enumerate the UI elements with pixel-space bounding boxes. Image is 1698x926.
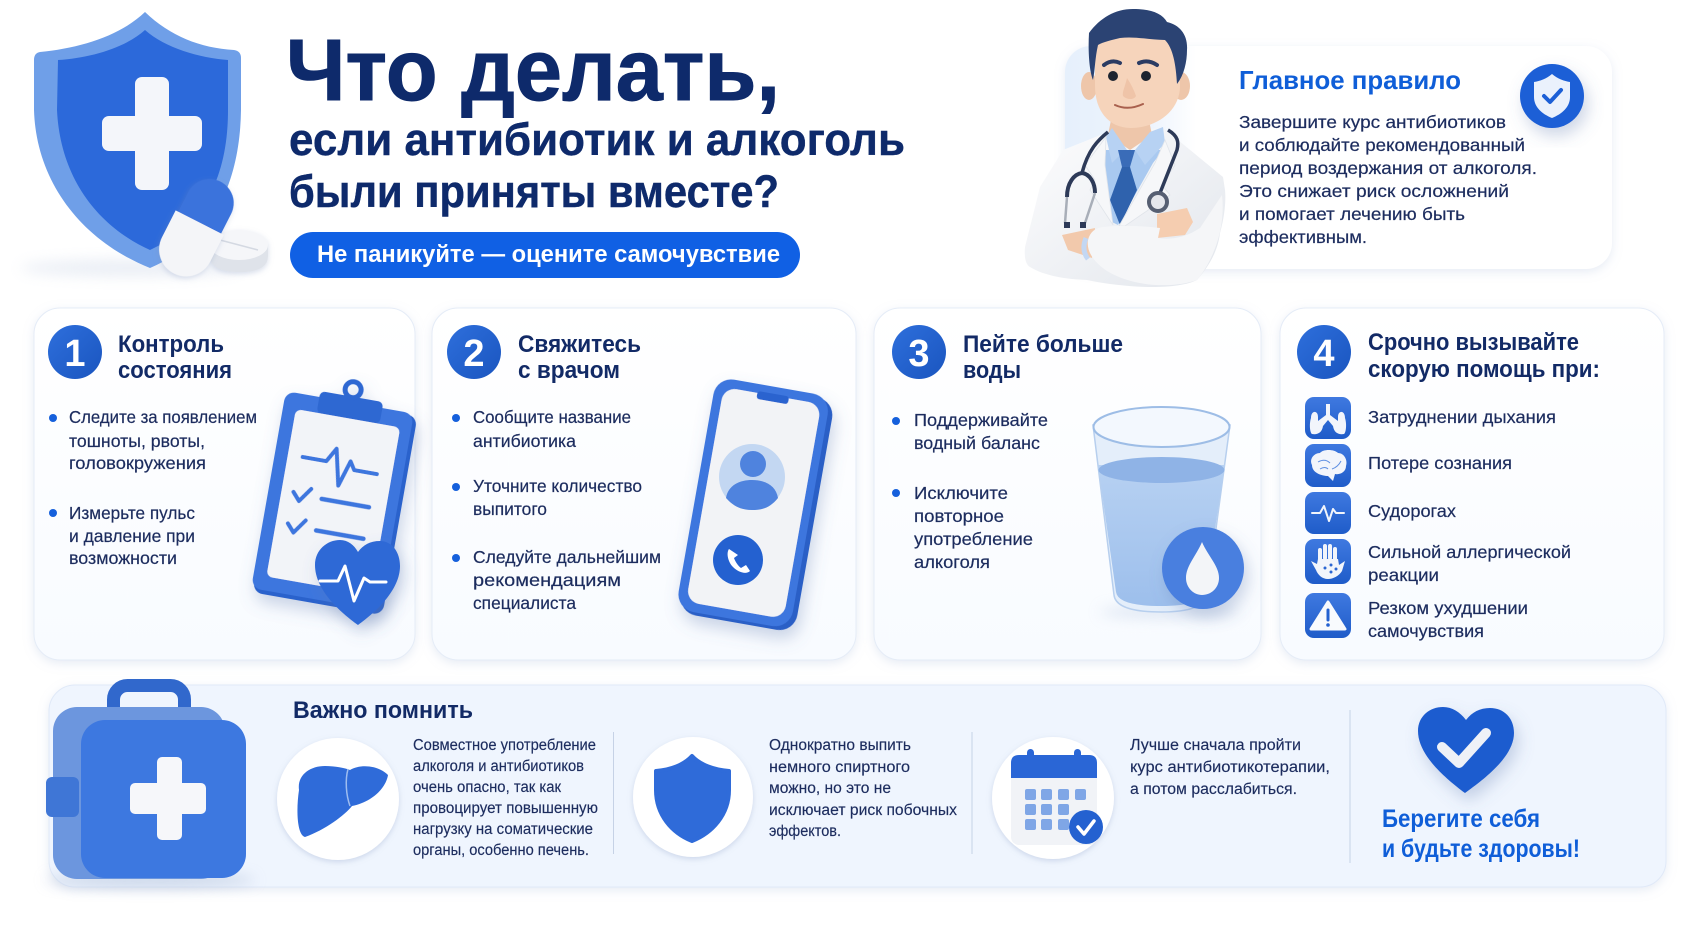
text: allergy: Сильной аллергической <box>1368 542 1571 562</box>
list: step 2: выпитого <box>473 499 547 519</box>
text: remember 2: исключает риск побочных <box>769 802 957 819</box>
title: были приняты вместе? <box>289 166 779 217</box>
sub: crossed arms <box>1062 228 1095 258</box>
step number 3: 3 <box>908 333 930 375</box>
text: remember 1: очень опасно, так как <box>413 779 561 796</box>
sub: drop badge <box>1162 527 1244 609</box>
heading: step 1: Контроль <box>118 331 224 358</box>
list: step 3: водный баланс <box>914 433 1040 453</box>
list: step 2: Сообщите название <box>473 407 631 427</box>
list: step 2 <box>452 407 661 613</box>
step number 1 <box>48 325 102 379</box>
heading: remember: Важно помнить <box>293 697 473 724</box>
text: allergy <box>1368 542 1571 585</box>
sub: stethoscope <box>1064 130 1178 228</box>
heading: step 2: с врачом <box>518 357 620 384</box>
text: remember 1: алкоголя и антибиотиков <box>413 758 584 775</box>
text: worsening: Резком ухудшении <box>1368 598 1528 618</box>
list: step 2: рекомендациям <box>473 570 621 590</box>
icon: warning <box>1305 593 1351 638</box>
icon: hand allergy <box>1305 539 1351 584</box>
heading: step 3 <box>963 331 1123 384</box>
icon: first aid kit <box>45 686 255 887</box>
step number 4: 4 <box>1313 333 1335 375</box>
heading: step 2 <box>518 331 641 384</box>
panel: remember <box>49 685 1666 887</box>
title <box>286 22 905 217</box>
list: step 3: Поддерживайте <box>914 410 1048 430</box>
text: remember 3: Лучше сначала пройти <box>1130 737 1301 754</box>
text: remember 1 <box>413 737 598 859</box>
text: breathing: Затруднении дыхания <box>1368 407 1556 427</box>
panel: step 2 <box>432 308 856 660</box>
text: remember 1: провоцирует повышенную <box>413 800 598 817</box>
text: remember 2 <box>769 737 957 840</box>
icon: clipboard with heart <box>250 370 421 625</box>
title: Что делать, <box>286 22 780 119</box>
text: seizures: Судорогах <box>1368 501 1456 521</box>
heading: step 3: воды <box>963 357 1021 384</box>
step number 3 <box>892 325 946 379</box>
icon: shield with cross and pills <box>20 12 268 286</box>
callout: do not panic: Не паникуйте — оцените самочувствие <box>317 241 780 268</box>
panel: step 4 <box>1280 308 1664 660</box>
text: worsening <box>1368 598 1528 641</box>
list: step 3: Исключите <box>914 483 1008 503</box>
text: remember 1: органы, особенно печень. <box>413 842 589 859</box>
panel: step 3 <box>874 308 1261 660</box>
icon: shield check <box>1520 64 1584 128</box>
step number 2 <box>447 325 501 379</box>
text: main rule body: период воздержания от алкоголя. <box>1239 158 1537 178</box>
text: worsening: самочувствия <box>1368 621 1484 641</box>
heading: step 2: Свяжитесь <box>518 331 641 358</box>
icon: phone <box>675 377 836 633</box>
text: remember 3: курс антибиотикотерапии, <box>1130 759 1330 776</box>
list: step 2: Следуйте дальнейшим <box>473 547 661 567</box>
panel: step 1 <box>34 308 421 660</box>
icon: heart with check <box>1418 707 1514 793</box>
heading: step 4: скорую помощь при: <box>1368 356 1600 383</box>
heading: step 3: Пейте больше <box>963 331 1123 358</box>
text: consciousness: Потере сознания <box>1368 453 1512 473</box>
icon: lungs <box>1305 397 1351 439</box>
heading: step 4: Срочно вызывайте <box>1368 329 1579 356</box>
heading: step 4 <box>1368 329 1600 383</box>
sub: lapels <box>1085 137 1175 226</box>
icon: pulse <box>1305 492 1351 534</box>
icon: glass of water <box>1093 407 1244 618</box>
list: step 1: и давление при <box>69 526 195 546</box>
text: remember 2: можно, но это не <box>769 780 891 797</box>
panel: main rule <box>1065 46 1612 269</box>
icon: brain <box>1305 444 1351 487</box>
list: step 1: Следите за появлением <box>69 407 257 427</box>
callout: do not panic <box>290 232 800 278</box>
title: если антибиотик и алкоголь <box>289 114 905 165</box>
text: main rule body: и соблюдайте рекомендованный <box>1239 135 1525 155</box>
heading: main rule: Главное правило <box>1239 65 1461 95</box>
list: step 3: повторное <box>914 506 1004 526</box>
text: remember 1: Совместное употребление <box>413 737 596 754</box>
list: step 3: употребление <box>914 529 1033 549</box>
text: remember 3: а потом расслабиться. <box>1130 781 1297 798</box>
list: step 2: антибиотика <box>473 431 576 451</box>
list: step 2: специалиста <box>473 593 576 613</box>
step number 4 <box>1297 325 1351 379</box>
text: remember 2: эффектов. <box>769 823 841 840</box>
list: step 3 <box>892 410 1048 572</box>
icon: doctor <box>1025 9 1225 287</box>
heading: step 1: состояния <box>118 357 232 384</box>
text: main rule body: Это снижает риск осложнений <box>1239 181 1509 201</box>
list: step 3: алкоголя <box>914 552 990 572</box>
list: step 2: Уточните количество <box>473 476 642 496</box>
list: step 1: головокружения <box>69 453 206 473</box>
icon: shield circle <box>633 737 753 857</box>
text: main rule body: Завершите курс антибиотиков <box>1239 112 1506 132</box>
closing message: и будьте здоровы! <box>1382 835 1580 863</box>
closing message: Берегите себя <box>1382 805 1540 833</box>
sub: head and neck <box>1081 9 1190 167</box>
text: remember 3 <box>1130 737 1330 798</box>
closing message <box>1382 805 1580 863</box>
list: step 1: Измерьте пульс <box>69 503 195 523</box>
text: allergy: реакции <box>1368 565 1439 585</box>
text: remember 2: немного спиртного <box>769 759 910 776</box>
text: main rule body <box>1239 112 1537 247</box>
text: main rule body: эффективным. <box>1239 227 1367 247</box>
text: remember 2: Однократно выпить <box>769 737 911 754</box>
list: step 1: возможности <box>69 548 177 568</box>
list: step 1: тошноты, рвоты, <box>69 431 205 451</box>
icon: liver circle <box>277 738 399 860</box>
step number 1: 1 <box>64 333 86 375</box>
list: step 1 <box>49 407 257 568</box>
text: main rule body: и помогает лечению быть <box>1239 204 1465 224</box>
icon: calendar circle <box>992 737 1114 859</box>
text: remember 1: нагрузку на соматические <box>413 821 593 838</box>
step number 2: 2 <box>463 333 485 375</box>
heading: step 1 <box>118 331 232 384</box>
